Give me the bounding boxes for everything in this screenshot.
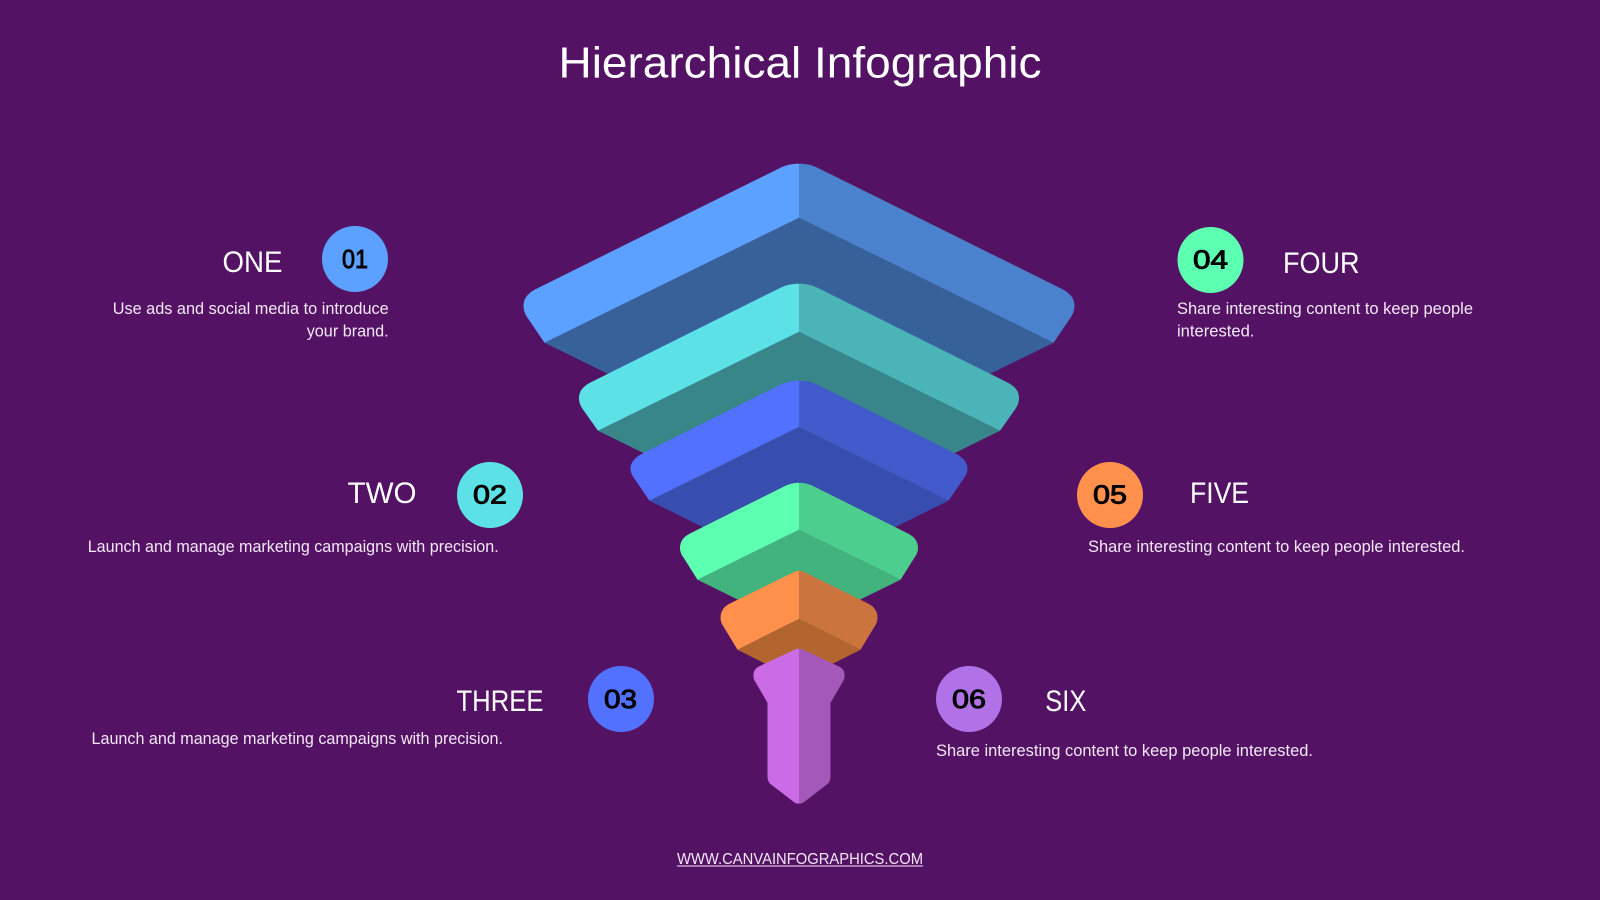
tier 4: green	[680, 483, 918, 630]
description one	[113, 300, 389, 340]
tier 3: indigo	[630, 381, 968, 575]
tier 1: blue	[524, 164, 1074, 468]
badge 05: 05	[1093, 480, 1127, 510]
tier 2: cyan	[579, 284, 1019, 530]
badge 03: 03	[604, 684, 637, 714]
heading five: FIVE	[1190, 477, 1249, 510]
badge 01	[322, 226, 388, 292]
badge 06: 06	[952, 684, 986, 714]
description four: Share interesting content to keep people	[1177, 300, 1473, 318]
badge 02: 02	[473, 480, 507, 510]
item five	[1077, 462, 1465, 556]
description six: Share interesting content to keep people interested.	[936, 742, 1313, 760]
description two: Launch and manage marketing campaigns with precision.	[88, 538, 499, 556]
title: Hierarchical Infographic	[558, 38, 1042, 88]
tier 6: purple stem	[753, 649, 845, 804]
item two	[88, 462, 523, 556]
description one: your brand.	[307, 322, 389, 340]
badge 06	[936, 666, 1002, 732]
description four: interested.	[1177, 322, 1254, 340]
tier 5: orange	[720, 571, 878, 681]
badge 03	[588, 666, 654, 732]
description four	[1177, 300, 1473, 340]
description three: Launch and manage marketing campaigns with precision.	[92, 730, 503, 748]
badge 01: 01	[342, 244, 368, 274]
badge 05	[1077, 462, 1143, 528]
heading one: ONE	[222, 246, 282, 279]
heading six: SIX	[1045, 685, 1087, 718]
heading three: THREE	[456, 685, 544, 718]
badge 02	[457, 462, 523, 528]
badge 04: 04	[1193, 244, 1228, 274]
footer link: WWW.CANVAINFOGRAPHICS.COM	[677, 851, 923, 868]
item four	[1177, 227, 1473, 340]
funnel diagram	[524, 164, 1074, 804]
description one: Use ads and social media to introduce	[113, 300, 389, 318]
heading two: TWO	[348, 477, 416, 510]
badge 04	[1178, 227, 1244, 293]
description five: Share interesting content to keep people interested.	[1088, 538, 1465, 556]
item one	[113, 226, 389, 340]
item six	[936, 666, 1313, 760]
heading four: FOUR	[1283, 247, 1360, 280]
item three	[92, 666, 654, 748]
